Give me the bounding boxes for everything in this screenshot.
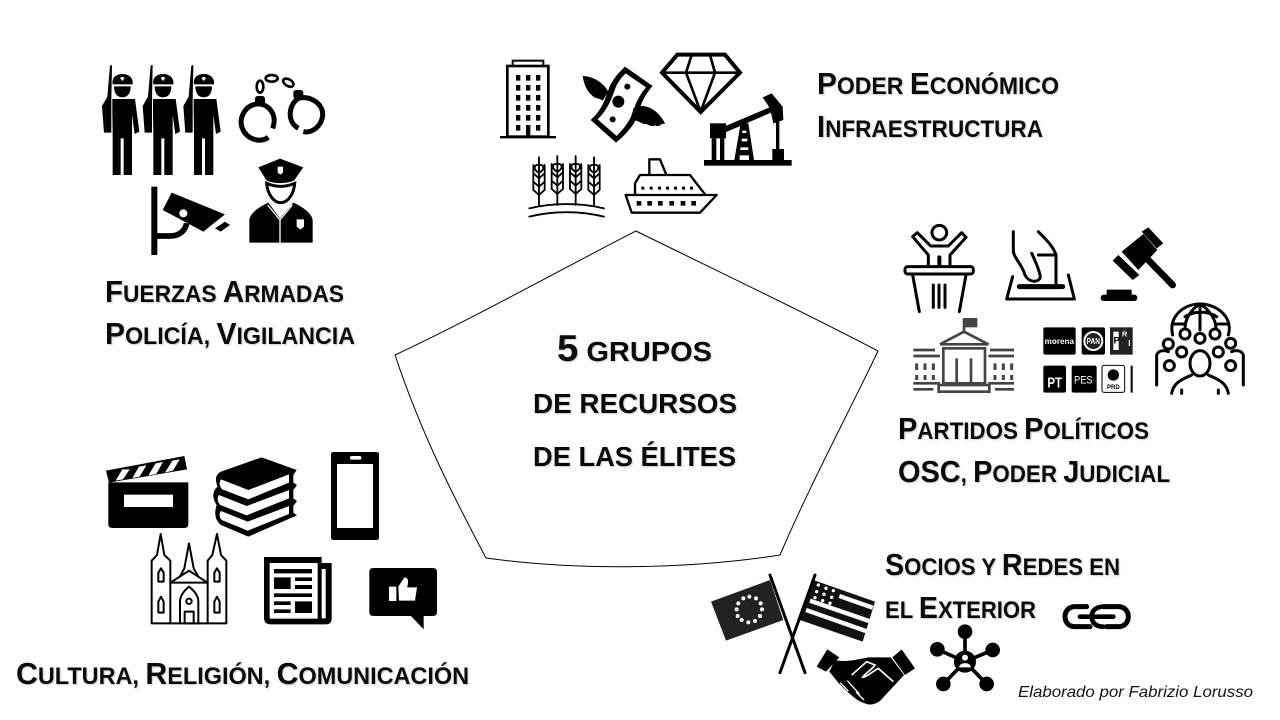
icon: cathedral (152, 534, 226, 623)
icon: speaker at podium (905, 225, 973, 312)
icon: office building (500, 61, 556, 138)
icon: party logos: R (1122, 330, 1128, 339)
icons: economy (500, 55, 792, 217)
panel: fuerzas armadas (102, 65, 355, 351)
icon: party logos: PAN (1087, 337, 1100, 346)
icon: oil pumpjack (704, 93, 792, 166)
heading: partidos políticos: PARTIDOS POLÍTICOS (898, 411, 1149, 446)
icon: global civil society (1157, 304, 1243, 393)
heading: partidos políticos (898, 411, 1170, 489)
icons: politics (905, 225, 1243, 393)
icon: party logos: I (1128, 339, 1130, 348)
heading: partidos políticos: OSC, PODER JUDICIAL (898, 454, 1170, 489)
panel: partidos políticos (898, 225, 1243, 489)
heading: cultura: CULTURA, RELIGIÓN, COMUNICACIÓN (16, 656, 469, 691)
icon: surveillance camera (151, 187, 230, 255)
central heading: DE RECURSOS (533, 388, 737, 419)
icon: clapperboard (106, 456, 188, 528)
icon: network hub (930, 624, 1000, 691)
heading: socios y redes: EL EXTERIOR (885, 590, 1036, 625)
heading: socios y redes: SOCIOS Y REDES EN (885, 547, 1120, 582)
icon: cruise ship (626, 159, 717, 213)
heading: socios y redes (885, 547, 1120, 625)
icon: party logos: PT (1047, 375, 1062, 391)
icons: international networks (711, 575, 1128, 704)
icon: party logos: PES (1074, 374, 1093, 386)
icon: smartphone (331, 452, 379, 540)
icon: chain link (1065, 607, 1128, 627)
central heading: DE LAS ÉLITES (533, 441, 736, 472)
icon: diamond (662, 55, 740, 112)
icon: flying money (583, 67, 665, 143)
icon: hand voting (1007, 232, 1074, 299)
icon: capitol building (913, 318, 1014, 392)
icon: wheat field (529, 156, 604, 217)
icon: newspaper (264, 557, 332, 624)
panel: cultura (16, 452, 469, 691)
central heading (533, 328, 737, 472)
panel: central pentagon (395, 231, 878, 567)
icon: gavel (1101, 227, 1173, 301)
icon: books (213, 457, 297, 537)
panel: socios y redes (711, 547, 1128, 704)
icon: police officer (249, 159, 313, 243)
heading: poder económico: INFRAESTRUCTURA (817, 109, 1043, 144)
heading: poder económico (817, 66, 1059, 144)
icon: party logos (1043, 327, 1133, 393)
heading: fuerzas armadas: POLICÍA, VIGILANCIA (105, 316, 355, 351)
icon: party logos: morena (1045, 336, 1074, 346)
icon: crossed flags (711, 575, 875, 673)
icons: security forces (102, 65, 323, 255)
heading: fuerzas armadas (105, 274, 355, 351)
icon: soldiers (102, 65, 221, 175)
central heading: 5 GRUPOS (557, 328, 712, 369)
heading: fuerzas armadas: FUERZAS ARMADAS (105, 274, 344, 309)
heading: poder económico: PODER ECONÓMICO (817, 66, 1059, 101)
icon: party logos: PRD (1107, 385, 1120, 391)
icons: culture and communication (106, 452, 437, 629)
icon: handcuffs (241, 75, 323, 140)
credit text: Elaborado por Fabrizio Lorusso (1018, 684, 1253, 701)
icon: handshake (817, 649, 915, 704)
icon: party logos: P (1114, 335, 1120, 345)
icon: like speech bubble (369, 568, 437, 629)
panel: poder económico (500, 55, 1059, 217)
